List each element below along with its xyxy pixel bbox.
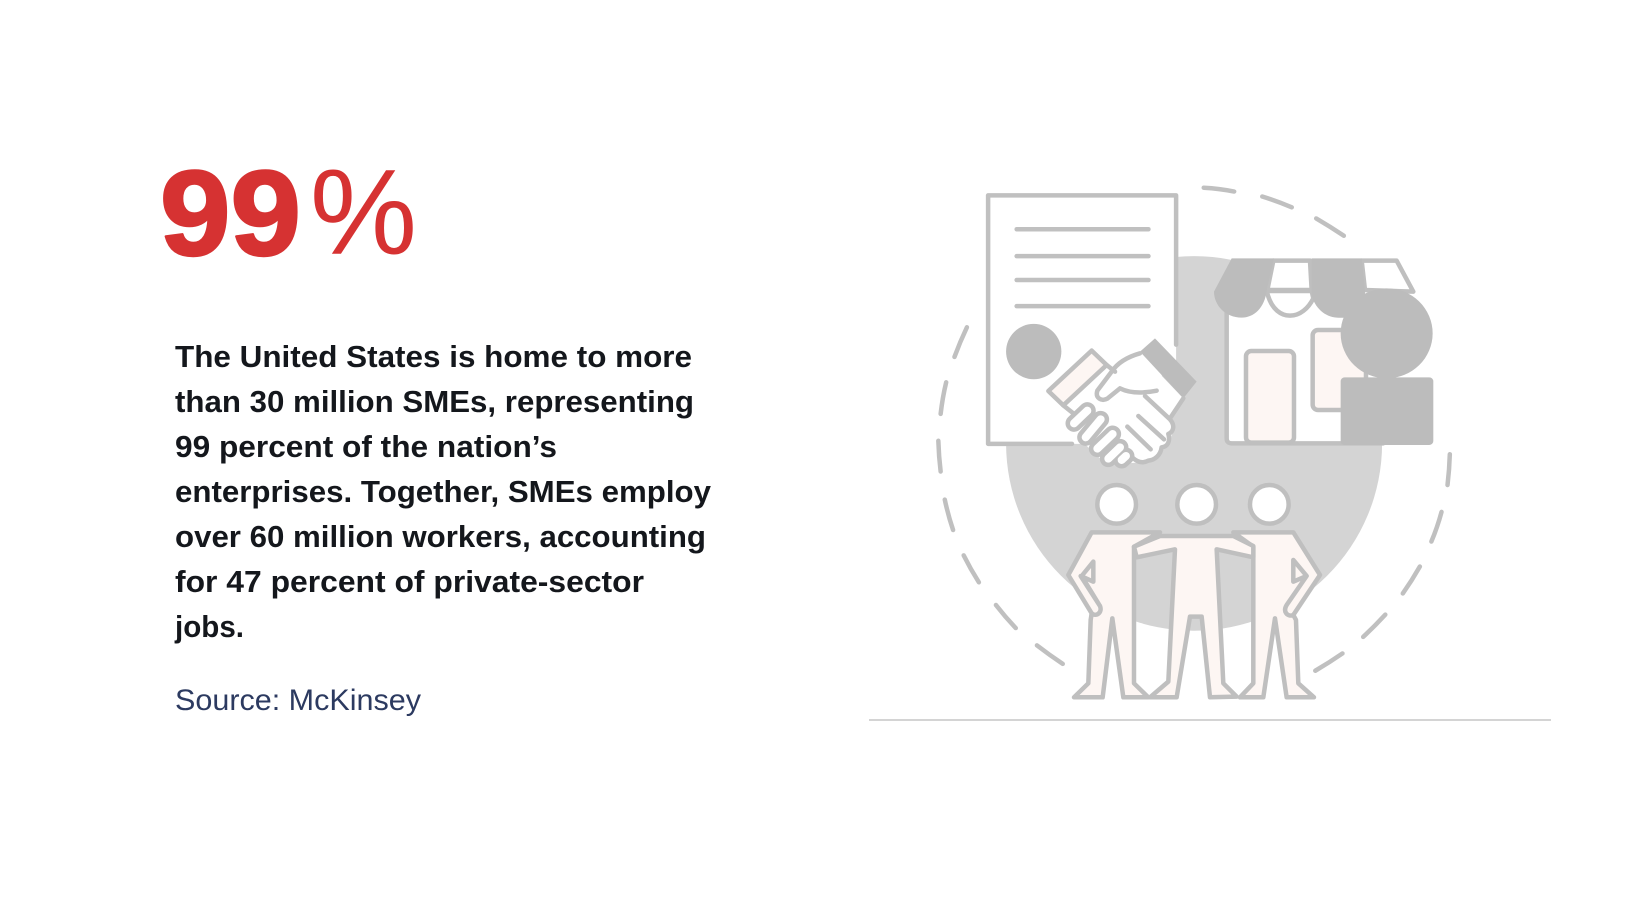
body text: than 30 million SMEs, representing bbox=[175, 384, 694, 419]
body text: The United States is home to more bbox=[175, 339, 692, 374]
headline statistic: 99 bbox=[160, 145, 301, 281]
icon: handshake bbox=[1048, 338, 1197, 464]
headline statistic bbox=[160, 144, 417, 281]
body text: over 60 million workers, accounting bbox=[175, 519, 706, 554]
body text: 99 percent of the nation’s bbox=[175, 429, 557, 464]
background circle and dashed ring bbox=[938, 188, 1450, 671]
icon: three people bbox=[1068, 485, 1320, 697]
body text: enterprises. Together, SMEs employ bbox=[175, 474, 712, 509]
icon: contract document bbox=[988, 195, 1176, 444]
body text: jobs. bbox=[174, 609, 244, 644]
body text bbox=[174, 339, 712, 644]
headline statistic: % bbox=[310, 144, 417, 280]
ground line bbox=[869, 719, 1551, 721]
icon: storefront bbox=[1214, 258, 1433, 445]
source line: Source: McKinsey bbox=[175, 684, 421, 717]
body text: for 47 percent of private-sector bbox=[175, 564, 644, 599]
illustration: SME partnership bbox=[938, 188, 1450, 697]
